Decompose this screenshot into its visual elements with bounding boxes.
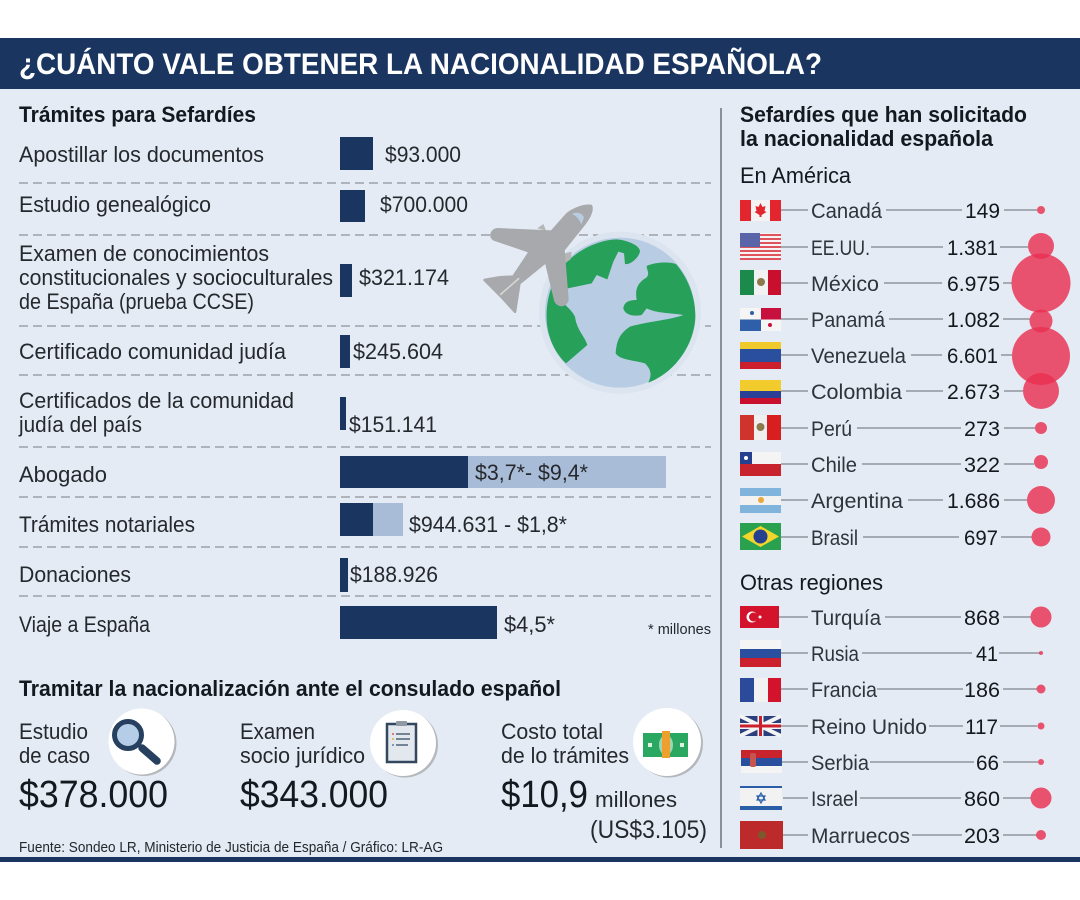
row: Brasil: 697 bbox=[964, 527, 998, 550]
row: examen CCSE: Examen de conocimientos bbox=[19, 241, 269, 266]
row: trámites notariales: $944.631 - $1,8* bbox=[409, 512, 567, 537]
heading: sefardíes: la nacionalidad española bbox=[740, 126, 994, 151]
row: Argentina: Argentina bbox=[811, 490, 903, 513]
row: Canadá: 149 bbox=[965, 200, 1000, 223]
row: Rusia: Rusia bbox=[811, 643, 859, 666]
row: Argentina: 1.686 bbox=[947, 490, 1000, 513]
row: Venezuela: Venezuela bbox=[811, 345, 906, 368]
row: Colombia: Colombia bbox=[811, 381, 902, 404]
row: Marruecos: Marruecos bbox=[811, 825, 910, 848]
item: estudio de caso bbox=[19, 708, 176, 816]
row: Perú bbox=[740, 415, 1047, 441]
panel: consulado bbox=[19, 676, 707, 856]
row: Venezuela: 6.601 bbox=[947, 345, 998, 368]
row: Turquía: 868 bbox=[964, 607, 1000, 630]
row: Reino Unido: 117 bbox=[965, 716, 998, 739]
row: EE.UU.: 1.381 bbox=[947, 237, 998, 260]
item: costo total: $10,9 bbox=[501, 774, 588, 816]
row: Turquía: Turquía bbox=[811, 607, 881, 630]
row: México: México bbox=[811, 273, 879, 296]
row: certificados del país: judía del país bbox=[18, 412, 142, 437]
row: certificado comunidad judía bbox=[19, 335, 443, 368]
row: examen CCSE: de España (prueba CCSE) bbox=[19, 289, 254, 314]
row: Colombia bbox=[740, 373, 1059, 409]
row: certificado comunidad judía: $245.604 bbox=[353, 339, 443, 364]
row: Israel: Israel bbox=[811, 788, 858, 811]
item: examen socio jurídico: $343.000 bbox=[240, 774, 388, 816]
item: estudio de caso: $378.000 bbox=[19, 774, 168, 816]
row: estudio genealógico bbox=[19, 190, 468, 222]
row: Israel bbox=[740, 786, 1052, 811]
icon: globe and plane bbox=[485, 206, 701, 394]
row: México: 6.975 bbox=[947, 273, 1000, 296]
row: apostillar: $93.000 bbox=[385, 142, 461, 167]
row: estudio genealógico: Estudio genealógico bbox=[19, 192, 211, 217]
heading: sefardíes bbox=[740, 102, 1027, 151]
subheading: en américa: En América bbox=[740, 163, 852, 188]
row: México bbox=[740, 254, 1070, 312]
row: Colombia: 2.673 bbox=[947, 381, 1000, 404]
panel: sefardíes que han solicitado bbox=[740, 102, 1070, 849]
row: Francia: 186 bbox=[964, 679, 1000, 702]
row: abogado: $3,7*- $9,4* bbox=[475, 460, 588, 485]
panel: trámites para sefardíes bbox=[18, 102, 711, 639]
row: estudio genealógico: $700.000 bbox=[380, 192, 468, 217]
item: estudio de caso: de caso bbox=[19, 743, 90, 768]
item: estudio de caso: Estudio bbox=[19, 719, 88, 744]
row: Panamá: Panamá bbox=[811, 309, 885, 332]
row: Chile: Chile bbox=[811, 454, 857, 477]
note: millones: * millones bbox=[648, 621, 711, 638]
row: certificados del país bbox=[18, 388, 437, 437]
row: viaje a españa: Viaje a España bbox=[19, 612, 151, 637]
item: costo total: Costo total bbox=[501, 719, 603, 744]
source: Fuente: Sondeo LR, Ministerio de Justicia de España / Gráfico: LR-AG bbox=[19, 840, 443, 856]
row: certificado comunidad judía: Certificado comunidad judía bbox=[19, 339, 287, 364]
row: Venezuela bbox=[740, 327, 1070, 385]
row: donaciones: $188.926 bbox=[350, 562, 438, 587]
title banner: ¿CUÁNTO VALE OBTENER LA NACIONALIDAD ESPAÑOLA? bbox=[19, 47, 822, 81]
row: Canadá bbox=[740, 200, 1045, 223]
row: Canadá: Canadá bbox=[811, 200, 882, 223]
row: EE.UU. bbox=[740, 233, 1054, 260]
item: costo total: (US$3.105) bbox=[590, 816, 707, 844]
row: donaciones bbox=[19, 558, 438, 592]
heading: sefardíes: Sefardíes que han solicitado bbox=[740, 102, 1027, 127]
row: Argentina bbox=[740, 486, 1055, 514]
title banner bbox=[0, 38, 1080, 89]
row: Reino Unido: Reino Unido bbox=[811, 716, 927, 739]
row: Francia: Francia bbox=[811, 679, 877, 702]
row: Perú: 273 bbox=[964, 418, 1000, 441]
row: certificados del país: $151.141 bbox=[349, 412, 437, 437]
row: trámites notariales bbox=[19, 503, 567, 537]
row: trámites notariales: Trámites notariales bbox=[19, 512, 195, 537]
row: apostillar bbox=[19, 137, 461, 170]
icon: clipboard bbox=[370, 710, 438, 778]
row: viaje a españa bbox=[19, 606, 555, 639]
row: Chile: 322 bbox=[964, 454, 1000, 477]
row: Rusia: 41 bbox=[976, 643, 998, 666]
row: Francia bbox=[740, 678, 1046, 702]
row: Serbia bbox=[741, 750, 1044, 775]
row: Serbia: 66 bbox=[976, 752, 999, 775]
row: viaje a españa: $4,5* bbox=[504, 612, 555, 637]
row: abogado bbox=[19, 456, 666, 488]
row: examen CCSE bbox=[19, 241, 449, 314]
row dividers bbox=[19, 183, 711, 596]
row: donaciones: Donaciones bbox=[19, 562, 131, 587]
row: examen CCSE: constitucionales y socioculturales bbox=[19, 265, 333, 290]
divider bbox=[720, 108, 722, 848]
row: Panamá: 1.082 bbox=[947, 309, 1000, 332]
item: examen socio jurídico: socio jurídico bbox=[240, 743, 365, 768]
row: Perú: Perú bbox=[811, 418, 852, 441]
subheading: otras regiones: Otras regiones bbox=[740, 570, 883, 595]
row: Brasil: Brasil bbox=[811, 527, 858, 550]
row: Reino Unido bbox=[740, 716, 1044, 739]
row: certificados del país: Certificados de la comunidad bbox=[19, 388, 294, 413]
row: Israel: 860 bbox=[964, 788, 1000, 811]
row: Turquía bbox=[740, 606, 1052, 630]
item: examen socio jurídico: Examen bbox=[240, 719, 315, 744]
row: Marruecos bbox=[740, 821, 1046, 849]
row: apostillar: Apostillar los documentos bbox=[19, 142, 264, 167]
item: costo total: millones bbox=[595, 787, 677, 812]
item: costo total: de lo trámites bbox=[501, 743, 629, 768]
item: costo total bbox=[501, 708, 707, 844]
icon: banknotes bbox=[633, 708, 703, 778]
row: Panamá bbox=[740, 308, 1052, 332]
row: Brasil bbox=[740, 523, 1050, 550]
row: abogado: Abogado bbox=[19, 462, 107, 487]
row: Rusia bbox=[740, 640, 1043, 667]
heading: trámites para sefardíes: Trámites para Sefardíes bbox=[19, 102, 256, 127]
row: Serbia: Serbia bbox=[811, 752, 869, 775]
heading: tramitar ante el consulado: Tramitar la nacionalización ante el consulado español bbox=[19, 676, 561, 701]
row: examen CCSE: $321.174 bbox=[359, 265, 449, 290]
row: EE.UU.: EE.UU. bbox=[811, 237, 870, 260]
row: Marruecos: 203 bbox=[964, 825, 1000, 848]
row: Chile bbox=[740, 452, 1048, 477]
item: examen socio jurídico bbox=[240, 710, 438, 816]
icon: magnifier bbox=[108, 708, 176, 776]
